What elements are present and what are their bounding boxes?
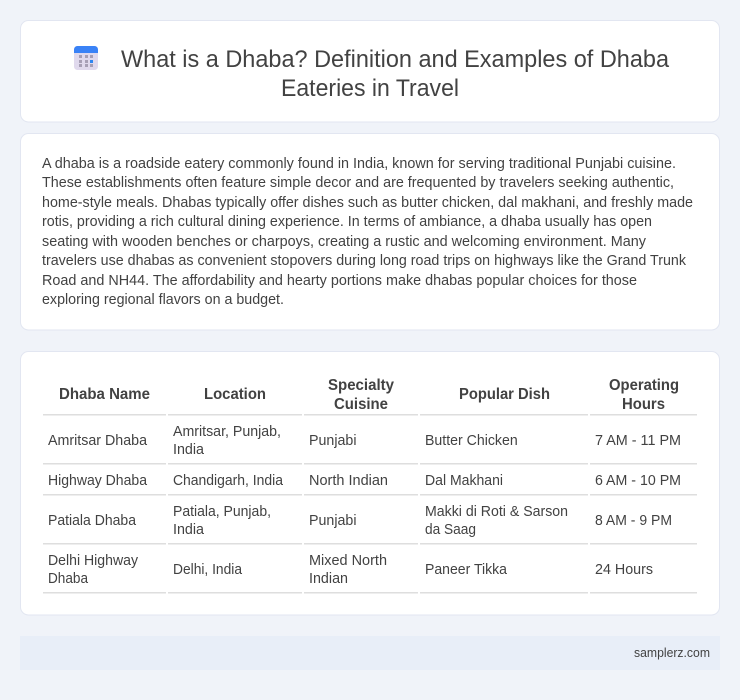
table row: Patiala Dhaba: Punjabi (309, 513, 356, 529)
table row: Amritsar Dhaba: Punjabi (309, 433, 356, 449)
table row: Amritsar Dhaba: Amritsar Dhaba (48, 433, 147, 449)
panel: title card (20, 20, 720, 122)
table row: Amritsar Dhaba (48, 424, 681, 458)
table header row (59, 377, 679, 413)
table row: Highway Dhaba: Chandigarh, India (173, 473, 283, 489)
table header row: Hours (622, 396, 665, 413)
table header row: Dhaba Name (59, 386, 150, 403)
footer bar (20, 636, 720, 670)
panel: description card (20, 134, 720, 330)
text block: description (42, 156, 693, 308)
table row: Patiala Dhaba: da Saag (425, 522, 476, 538)
table row: Delhi Highway Dhaba: Dhaba (48, 571, 88, 587)
icon: calendar (74, 46, 98, 70)
table row: Patiala Dhaba: India (173, 522, 204, 538)
table row: Delhi Highway Dhaba: Delhi Highway (48, 553, 139, 569)
table row: Highway Dhaba (48, 473, 681, 489)
table row: Patiala Dhaba (48, 504, 672, 538)
table row: Highway Dhaba: Dal Makhani (425, 473, 503, 489)
table row: Amritsar Dhaba: Amritsar, Punjab, (173, 424, 281, 440)
table header row: Popular Dish (459, 386, 550, 403)
table row: Amritsar Dhaba: Butter Chicken (425, 433, 518, 449)
table header row: Operating (609, 377, 679, 394)
table row: Highway Dhaba: North Indian (309, 473, 388, 489)
table row: Highway Dhaba: 6 AM - 10 PM (595, 473, 681, 489)
text block: description: A dhaba is a roadside eatery commonly found in India, known for serving traditional Punjabi cuisine. (42, 156, 676, 172)
table row: Delhi Highway Dhaba: Mixed North (309, 553, 387, 569)
table row: Delhi Highway Dhaba: 24 Hours (595, 562, 653, 578)
text block: description: Road and NH44. The affordability and hearty portions make dhabas popular choices for those (42, 273, 637, 289)
text block: description: travelers use dhabas as convenient stopovers during long road trips on highways like the Grand Trunk (42, 253, 687, 269)
table row: Amritsar Dhaba: India (173, 442, 204, 458)
table row: Patiala Dhaba: Patiala Dhaba (48, 513, 136, 529)
table header row: Location (204, 386, 266, 403)
text block: description: exploring regional flavors on a budget. (42, 292, 284, 308)
table row: Delhi Highway Dhaba: Delhi, India (173, 562, 242, 578)
text block: description: rotis, providing a rich cultural dining experience. In terms of ambiance, a dhaba usually has open (42, 214, 652, 230)
text block: description: These establishments often feature simple decor and are frequented by travelers seeking authentic, (42, 175, 674, 191)
table row: Delhi Highway Dhaba (48, 553, 653, 587)
table row: Delhi Highway Dhaba: Paneer Tikka (425, 562, 507, 578)
panel: table card (20, 352, 720, 615)
table header row: Specialty (328, 377, 394, 394)
table row: Highway Dhaba: Highway Dhaba (48, 473, 147, 489)
table header row: Cuisine (334, 396, 388, 413)
table row: Delhi Highway Dhaba: Indian (309, 571, 348, 587)
text block: description: seating with wooden benches or charpoys, creating a rustic and welcoming environment. Many (42, 234, 647, 250)
title: Eateries in Travel (281, 75, 459, 102)
table row: Patiala Dhaba: 8 AM - 9 PM (595, 513, 672, 529)
title: What is a Dhaba? Definition and Examples of Dhaba (121, 46, 669, 73)
table row: Patiala Dhaba: Makki di Roti & Sarson (425, 504, 568, 520)
table row: Amritsar Dhaba: 7 AM - 11 PM (595, 433, 681, 449)
footer text: source: samplerz.com (634, 646, 710, 660)
table row: Patiala Dhaba: Patiala, Punjab, (173, 504, 271, 520)
text block: description: home-style meals. Dhabas typically offer dishes such as butter chicken, dal makhani, and freshly made (42, 195, 693, 211)
title (121, 46, 669, 102)
